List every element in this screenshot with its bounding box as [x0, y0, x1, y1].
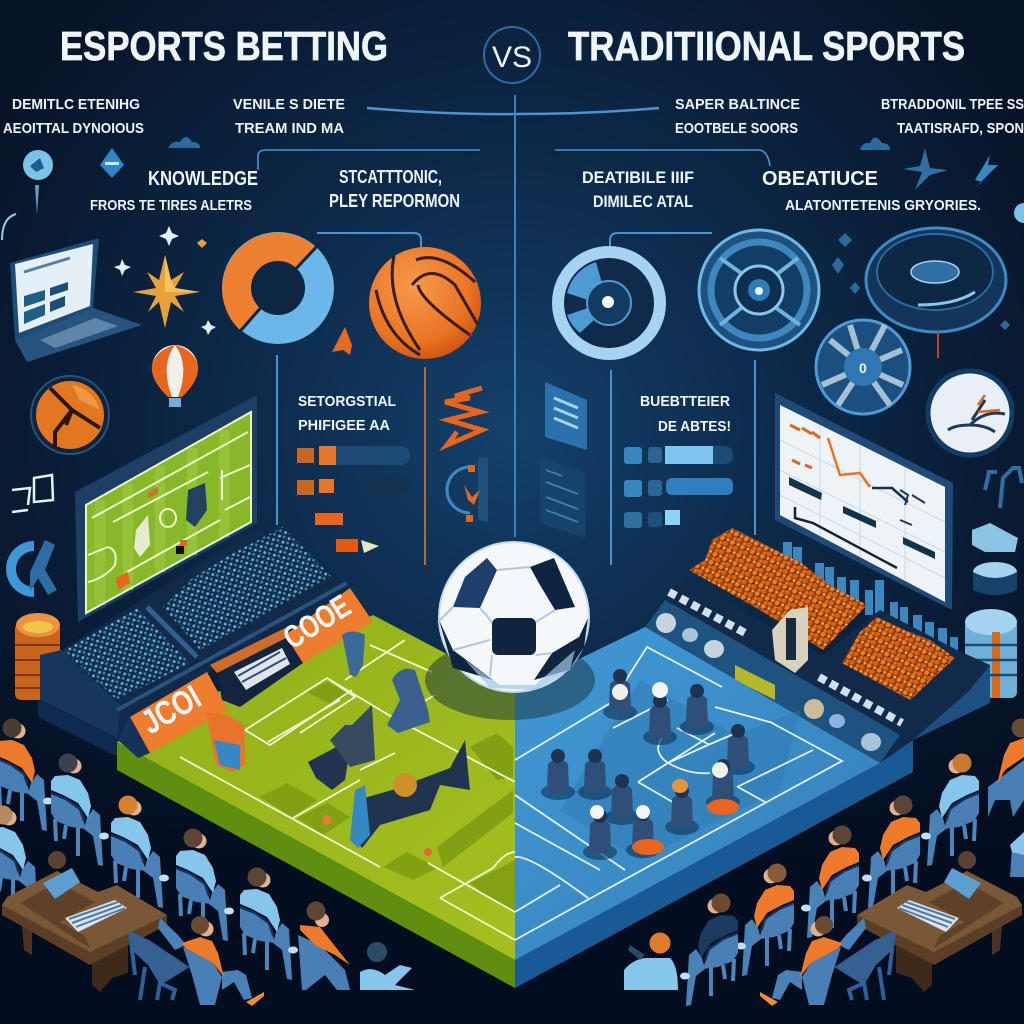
- text block: better: BUEBTTEIER: [640, 393, 730, 410]
- dial 1: [552, 246, 666, 360]
- icon: left side glyphs: [6, 475, 57, 597]
- banner: orange right: COOE: [277, 587, 357, 656]
- text block: venile: VENILE S DIETE: [233, 96, 345, 113]
- seated orange, no legs below frame: [298, 902, 350, 990]
- text block: super balance: EOOTBELE SOORS: [675, 120, 798, 137]
- connector lines: [258, 95, 770, 565]
- icon: right side glyphs: [832, 138, 1024, 595]
- panel: blue traditional field: [515, 627, 880, 960]
- field lines: [180, 640, 515, 940]
- title: traditional sports: TRADITIIONAL SPORTS: [568, 23, 965, 69]
- text block: top right: [881, 96, 1024, 137]
- discs: [656, 613, 676, 633]
- heading: detail: [582, 168, 694, 211]
- crowd: left lower: [63, 608, 190, 700]
- panel: right screen chart: [775, 393, 953, 610]
- columns: [772, 607, 808, 673]
- panel: blue field wall: [515, 740, 913, 988]
- crowd: right lower: [842, 617, 955, 700]
- clock gauge: [928, 371, 1012, 455]
- panel: green esports field: [117, 615, 515, 960]
- text block: better: DE ABTES!: [658, 418, 731, 435]
- icon: small blue icons left: [2, 137, 200, 240]
- edge viewer top right: [988, 718, 1024, 817]
- heading: detail: DEATIBILE IIIF: [582, 168, 694, 187]
- panel: left screen pitch: [75, 395, 257, 622]
- edge viewer right: [1010, 832, 1024, 877]
- heading: obeatuce: ALATONTETENIS GRYORIES.: [785, 197, 981, 214]
- heading: knowledge: [90, 168, 258, 214]
- icon: basketball: [369, 247, 481, 359]
- text block: strategic: PHIFIGEE AA: [298, 417, 390, 434]
- text block: venile: [233, 96, 345, 137]
- crowd: right upper: [689, 528, 867, 650]
- heading: obeatuce: [762, 168, 981, 214]
- icon: gauge: [447, 457, 488, 522]
- figures: blue field players: [541, 669, 755, 860]
- dial 3: [866, 228, 1006, 358]
- bottom cropped viewer: [360, 942, 415, 990]
- soccer ball: [438, 542, 589, 692]
- panel: right stands: [645, 528, 990, 763]
- figure: orange player: [206, 712, 245, 772]
- mini screen: [735, 665, 775, 700]
- banner: middle box: [210, 628, 303, 707]
- blue columns: [783, 542, 958, 657]
- vs badge: [484, 27, 540, 83]
- icon: small cracked basketball: [31, 376, 109, 454]
- audience: right: [624, 718, 1024, 1006]
- panel: left stands: [38, 527, 347, 757]
- dial 2: [699, 230, 819, 350]
- heading: knowledge: KNOWLEDGE: [148, 168, 258, 190]
- text block: venile: TREAM IND MA: [235, 120, 344, 137]
- icon: poker chips right: [965, 609, 1017, 698]
- heading: obeatuce: OBEATIUCE: [762, 168, 878, 190]
- bar chart: right: [624, 446, 733, 528]
- heading: statistic: PLEY REPORMON: [329, 191, 460, 211]
- vs badge: VS: [492, 41, 532, 74]
- icon: orange flame: [332, 327, 352, 355]
- heading: knowledge: FRORS TE TIRES ALETRS: [90, 197, 252, 214]
- audience: left: [0, 718, 415, 1006]
- icon: gold star: [114, 226, 216, 335]
- icon: poker chips left: [15, 613, 60, 700]
- text block: strategic: [298, 393, 396, 434]
- crowd: left upper: [163, 527, 332, 650]
- panel: green field wall: [117, 742, 515, 988]
- icon: laptop: [10, 238, 142, 362]
- bottom cropped viewer: [624, 932, 678, 990]
- title: esports betting: ESPORTS BETTING: [60, 23, 388, 69]
- heading: detail: DIMILEC ATAL: [593, 192, 693, 211]
- text block: strategic: SETORGSTIAL: [298, 393, 396, 410]
- text block: super balance: SAPER BALTINCE: [675, 96, 800, 113]
- dial 4: 0: [859, 360, 867, 376]
- text block: better: [640, 393, 731, 435]
- chart: donut: [222, 232, 334, 344]
- icon: balloon: [152, 345, 198, 407]
- dial 4: [816, 320, 910, 414]
- ball shadow: [425, 640, 595, 720]
- heading: statistic: [329, 167, 460, 211]
- text block: super balance: [675, 96, 800, 137]
- figures: green field players: [308, 632, 470, 856]
- text block: top left: AEOITTAL DYNOIOUS: [3, 120, 144, 137]
- heading: statistic: STCATTTONIC,: [339, 167, 442, 187]
- bar chart: left: [297, 446, 410, 553]
- figures strips: [669, 592, 902, 723]
- banner: orange left: JCOI: [135, 678, 208, 742]
- icon: orange zigzag: [445, 388, 482, 445]
- icon: document panels: [540, 382, 587, 538]
- text block: top left: DEMITLC ETENIHG: [12, 96, 140, 113]
- text block: top left: [3, 96, 144, 137]
- bottom vignette: [0, 640, 1024, 1024]
- banner: orange left: [118, 672, 228, 758]
